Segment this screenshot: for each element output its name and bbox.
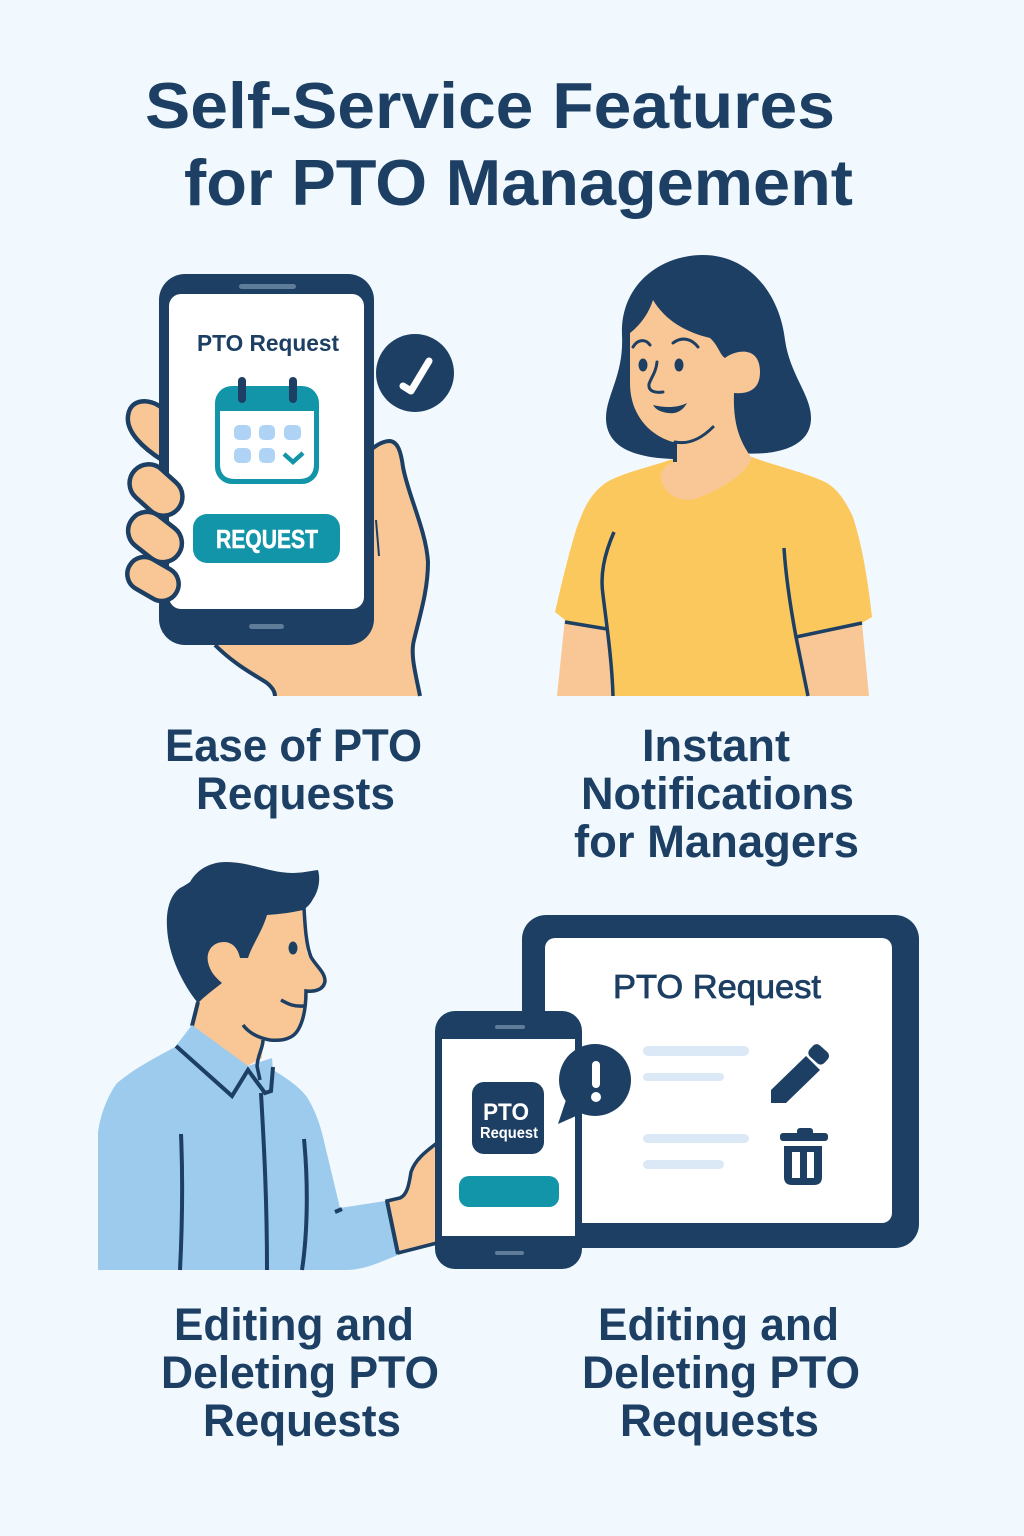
- hand: [387, 1143, 437, 1255]
- hair: [167, 862, 319, 1003]
- caption: editing and deleting, left: [161, 1299, 439, 1446]
- sleeve seams: [565, 532, 862, 696]
- tablet: [522, 915, 919, 1248]
- icon: trash can: [780, 1128, 828, 1185]
- caption: editing and deleting, right: [582, 1299, 860, 1446]
- face features: [638, 358, 687, 462]
- caption: editing and deleting, right: Requests: [620, 1395, 819, 1446]
- caption: editing and deleting, right: Editing and: [598, 1299, 839, 1350]
- fingers: [120, 456, 190, 607]
- illustration: woman in yellow shirt: [555, 255, 872, 696]
- PTO app tile: Request: [480, 1125, 539, 1142]
- top finger: [128, 401, 162, 460]
- illustration: man with phone: [98, 862, 437, 1270]
- caption: instant notifications for managers: for Managers: [574, 816, 859, 867]
- teal button: [459, 1176, 559, 1207]
- caption: editing and deleting, right: Deleting PTO: [582, 1347, 860, 1398]
- tablet screen: [545, 938, 892, 1223]
- caption: instant notifications for managers: Instant: [642, 720, 790, 771]
- face and neck: [630, 300, 760, 500]
- caption: instant notifications for managers: [574, 720, 859, 867]
- phone body: [435, 1011, 582, 1269]
- face outline and features: [192, 908, 325, 1040]
- thumb crease: [376, 520, 379, 556]
- list placeholders: [643, 1046, 749, 1169]
- caption: ease of PTO requests: Ease of PTO: [165, 720, 422, 771]
- caption: editing and deleting, left: Deleting PTO: [161, 1347, 439, 1398]
- phone home bar: [249, 624, 284, 629]
- caption: ease of PTO requests: [165, 720, 422, 819]
- icon: pencil: [771, 1042, 831, 1103]
- request button: REQUEST: [216, 524, 318, 554]
- phone screen: [442, 1039, 575, 1236]
- shirt: [555, 457, 872, 696]
- neck stroke over shirt: [257, 1040, 263, 1080]
- shirt: [98, 1025, 398, 1270]
- hair: [606, 255, 811, 459]
- phone speakers: [495, 1025, 525, 1029]
- phone body: [159, 274, 374, 645]
- PTO app tile: [472, 1082, 544, 1154]
- icon: check badge: [376, 334, 454, 412]
- title: Self-Service Features: [145, 69, 835, 142]
- arms: [557, 618, 869, 696]
- screen heading: PTO Request: [197, 330, 339, 356]
- caption: ease of PTO requests: Requests: [196, 768, 395, 819]
- shirt lines: [176, 1046, 398, 1270]
- icon: calendar: [215, 377, 319, 484]
- title: for PTO Management: [184, 146, 853, 219]
- tablet heading: PTO Request: [613, 968, 821, 1005]
- phone screen: [169, 294, 364, 609]
- illustration: tablet and phone with PTO request: [435, 915, 919, 1269]
- request button: [193, 514, 340, 563]
- title: [145, 69, 853, 219]
- neck and face: [192, 905, 325, 1070]
- caption: editing and deleting, left: Requests: [203, 1395, 401, 1446]
- caption: editing and deleting, left: Editing and: [174, 1299, 414, 1350]
- phone speaker: [239, 284, 296, 289]
- hand palm: [215, 441, 428, 696]
- PTO app tile: PTO: [483, 1099, 529, 1126]
- alert speech bubble: [558, 1044, 631, 1124]
- illustration: hand holding phone with PTO request: [120, 274, 454, 696]
- caption: instant notifications for managers: Notifications: [581, 768, 854, 819]
